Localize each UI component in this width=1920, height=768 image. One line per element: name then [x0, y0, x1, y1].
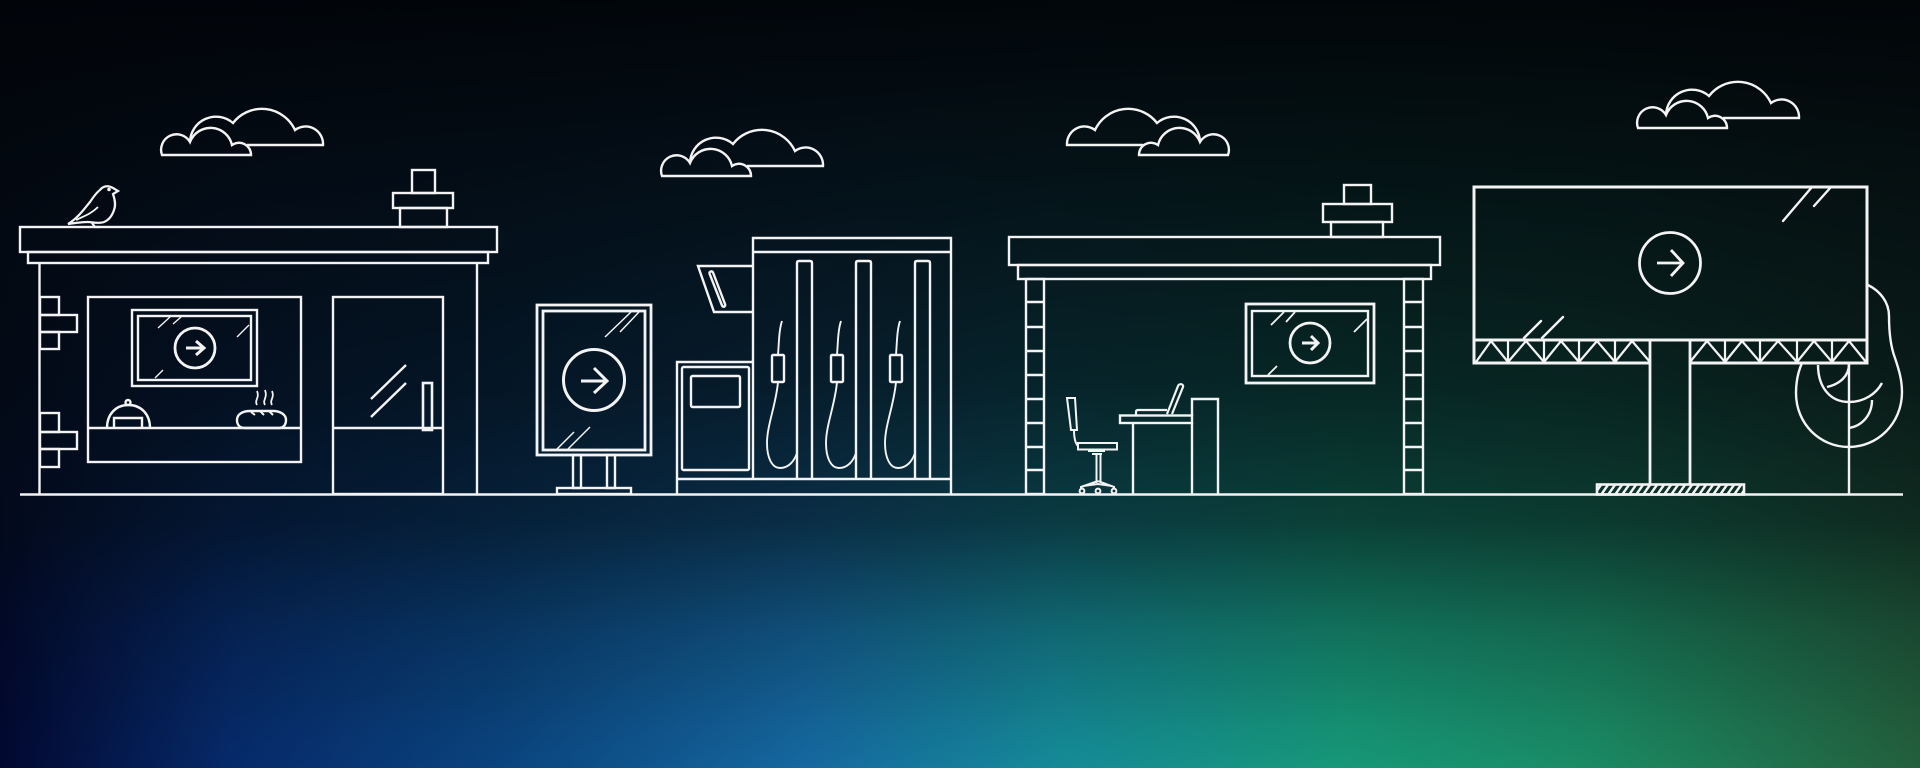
lower wall bricks — [40, 413, 77, 467]
panel: fuel station — [677, 238, 951, 494]
shop chimney — [393, 170, 453, 227]
shop window — [88, 297, 301, 462]
shop roof — [20, 227, 497, 263]
billboard board and truss frame — [1474, 187, 1867, 363]
shop door — [333, 297, 443, 494]
icon: steaming bread — [237, 390, 286, 428]
shop window sign — [132, 310, 257, 386]
panel: billboard — [1474, 187, 1867, 494]
office chair — [1067, 398, 1117, 493]
office roof — [1009, 237, 1440, 279]
panel: street poster sign — [537, 305, 651, 494]
shop walls — [40, 263, 477, 494]
cloud 1 — [161, 109, 323, 155]
fuel nozzle and hose 1 — [767, 321, 797, 468]
station housing — [677, 238, 951, 494]
right brick pillar — [1404, 279, 1423, 494]
ground line — [20, 493, 1903, 496]
icon: tree — [1796, 285, 1902, 494]
billboard post — [1650, 340, 1690, 485]
billboard truss — [1476, 340, 1866, 363]
panel: open office building — [1009, 185, 1440, 494]
cloud 4 — [1637, 82, 1799, 128]
desk — [1120, 399, 1218, 494]
pump columns — [797, 261, 930, 479]
office wall sign — [1246, 304, 1374, 383]
office chimney — [1323, 185, 1392, 237]
arrow circle icon — [564, 350, 624, 410]
canopy with slot — [698, 266, 753, 312]
billboard glare — [1524, 187, 1831, 338]
left brick pillar — [1026, 279, 1044, 494]
poster stand — [557, 455, 631, 494]
billboard arrow circle — [1640, 232, 1700, 294]
icon: food cloche — [107, 400, 150, 428]
fuel nozzle and hose 2 — [826, 321, 856, 468]
cloud 3 — [1067, 109, 1229, 155]
fuel nozzle and hose 3 — [885, 321, 915, 468]
payment kiosk — [677, 362, 753, 494]
icon: bird — [68, 186, 118, 227]
upper wall bricks — [40, 297, 77, 349]
cloud 2 — [661, 130, 823, 176]
billboard hatched base — [1597, 484, 1744, 494]
laptop — [1136, 384, 1183, 415]
panel: bakery shop — [20, 170, 497, 494]
